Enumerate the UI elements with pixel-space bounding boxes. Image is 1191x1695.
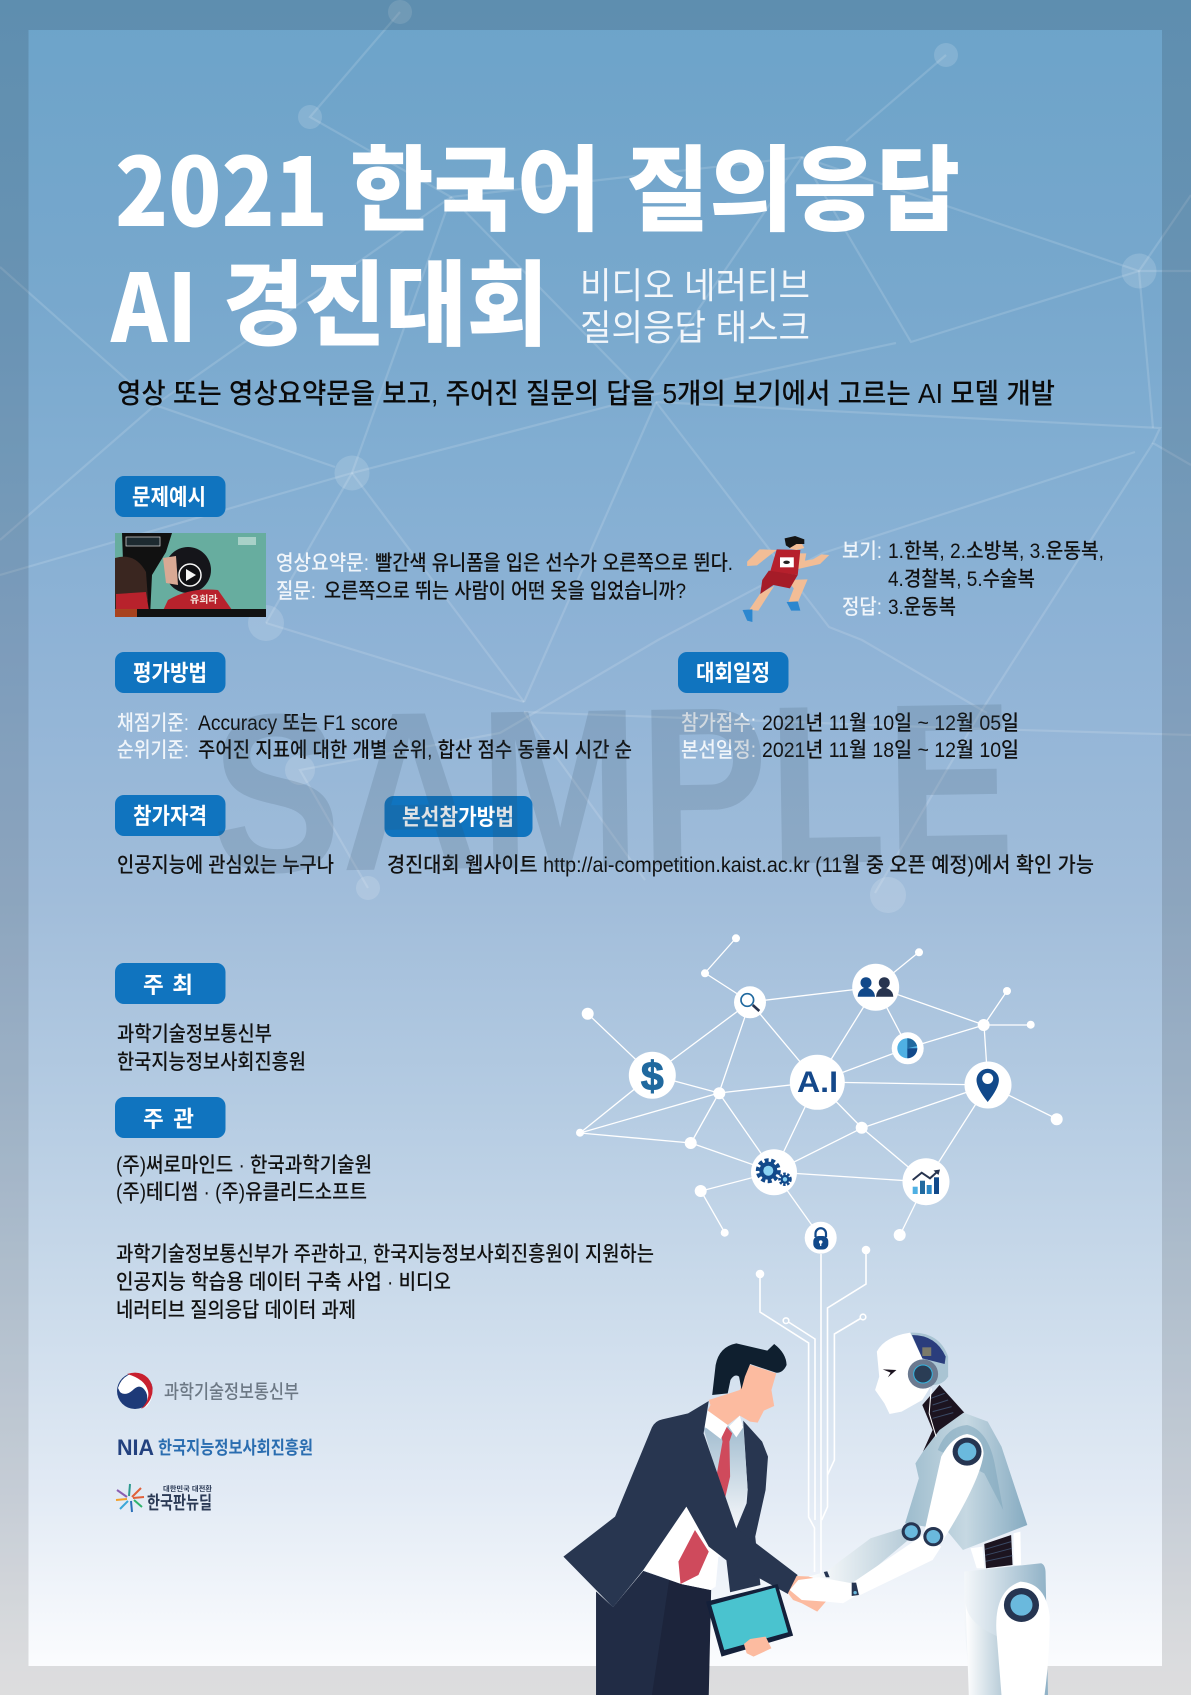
- logo: Ministry of Science and ICT: [117, 1373, 299, 1409]
- illustration: businessman and robot handshake: [563, 1333, 1050, 1695]
- answer choices: 3.운동복: [888, 596, 956, 619]
- button: 참가자격: 참가자격: [133, 804, 207, 829]
- button: 주최: [115, 963, 226, 1004]
- button: 평가방법: [115, 652, 226, 693]
- answer choices: 1.한복, 2.소방복, 3.운동복,: [888, 540, 1104, 563]
- icon: people: [852, 964, 899, 1011]
- icon: runner: [743, 536, 829, 622]
- circuit lines: [756, 1246, 870, 1574]
- project description: [116, 1243, 654, 1322]
- schedule text: 2021년 11월 10일 ~ 12월 05일: [762, 712, 1019, 735]
- title line 2: 경진대회: [223, 230, 548, 365]
- host organizations: [117, 1023, 306, 1074]
- icon: magnifier: [734, 986, 766, 1018]
- button: 문제예시: [115, 476, 226, 517]
- title line 1: 2021: [115, 118, 328, 254]
- button: 본선참가방법: [384, 796, 532, 837]
- evaluation text: 순위기준:: [117, 739, 189, 762]
- schedule text: [681, 712, 1019, 762]
- logo: Ministry of Science and ICT: 과학기술정보통신부: [164, 1381, 299, 1403]
- icon: dollar: $: [641, 1053, 664, 1099]
- button: 주관: [115, 1097, 226, 1138]
- evaluation text: 주어진 지표에 대한 개별 순위, 합산 점수 동률시 시간 순: [198, 739, 632, 762]
- businessman: [563, 1343, 826, 1695]
- answer choices: 정답:: [842, 596, 882, 619]
- video thumbnail: 유희라: [190, 593, 218, 606]
- button: 대회일정: [678, 652, 788, 693]
- example summary and question text: [276, 552, 733, 603]
- icon: gears: [751, 1149, 797, 1195]
- robot: [790, 1333, 1050, 1695]
- logo: NIA: [117, 1435, 313, 1460]
- answer choices: 보기:: [842, 540, 882, 563]
- evaluation text: [117, 712, 632, 762]
- organizing companies: [116, 1154, 372, 1204]
- organizing companies: (주)테디썸 · (주)유클리드소프트: [116, 1181, 367, 1204]
- subtitle: video narrative task: 비디오 네러티브: [580, 257, 810, 309]
- icon: A.I: [790, 1055, 845, 1110]
- organizing companies: (주)써로마인드 · 한국과학기술원: [116, 1154, 372, 1177]
- project description: 네러티브 질의응답 데이터 과제: [116, 1299, 356, 1322]
- schedule text: 2021년 11월 18일 ~ 12월 10일: [762, 739, 1019, 762]
- eligibility text: 인공지능에 관심있는 누구나: [117, 854, 334, 877]
- subtitle: video narrative task: 질의응답 태스크: [580, 299, 810, 351]
- title line 2: [110, 230, 548, 370]
- host organizations: 한국지능정보사회진흥원: [117, 1051, 306, 1074]
- icon: growth chart: [902, 1158, 950, 1205]
- button: 본선참가방법: 본선참가방법: [402, 805, 514, 830]
- button: 주최: 주 최: [143, 973, 193, 998]
- title line 2: AI: [110, 234, 197, 370]
- background network pattern: [0, 0, 1191, 913]
- example summary and question text: 영상요약문:: [276, 552, 369, 575]
- logo: Korean New Deal: [116, 1484, 213, 1513]
- logo: Korean New Deal: 한국판뉴딜: [147, 1493, 212, 1513]
- title line 1: [115, 115, 960, 254]
- icon: pie chart: [892, 1032, 924, 1064]
- schedule text: 참가접수:: [681, 712, 756, 735]
- example summary and question text: 빨간색 유니폼을 입은 선수가 오른쪽으로 뛴다.: [375, 552, 733, 575]
- title line 1: 한국어 질의응답: [350, 115, 960, 250]
- video thumbnail: [115, 533, 266, 617]
- example summary and question text: 오른쪽으로 뛰는 사람이 어떤 옷을 입었습니까?: [324, 580, 686, 603]
- evaluation text: Accuracy 또는 F1 score: [198, 712, 398, 735]
- button: 평가방법: 평가방법: [133, 661, 207, 686]
- subtitle: video narrative task: [580, 257, 810, 351]
- icon: location pin: [964, 1062, 1012, 1108]
- schedule text: 본선일정:: [681, 739, 756, 762]
- project description: 인공지능 학습용 데이터 구축 사업 · 비디오: [116, 1271, 451, 1294]
- description line: 영상 또는 영상요약문을 보고, 주어진 질문의 답을 5개의 보기에서 고르는 AI 모델 개발: [117, 378, 1055, 409]
- network nodes: [576, 934, 1063, 1241]
- watermark: SAMPLE: [210, 655, 1016, 920]
- logo: NIA: NIA: [117, 1435, 154, 1460]
- example summary and question text: 질문:: [276, 580, 316, 603]
- icon: A.I: A.I: [797, 1066, 838, 1099]
- logo: NIA: 한국지능정보사회진흥원: [158, 1438, 313, 1458]
- answer choices: [842, 540, 1104, 619]
- answer choices: 4.경찰복, 5.수술복: [888, 568, 1035, 591]
- network links: [580, 938, 1057, 1238]
- network diagram: [576, 934, 1063, 1254]
- logo: Korean New Deal: 대한민국 대전환: [163, 1484, 213, 1493]
- button: 문제예시: 문제예시: [132, 485, 206, 510]
- button: 주관: 주 관: [143, 1107, 194, 1132]
- project description: 과학기술정보통신부가 주관하고, 한국지능정보사회진흥원이 지원하는: [116, 1243, 654, 1266]
- icon: dollar: [629, 1052, 676, 1099]
- evaluation text: 채점기준:: [117, 712, 189, 735]
- icon: lock: [805, 1222, 837, 1254]
- host organizations: 과학기술정보통신부: [117, 1023, 272, 1046]
- button: 참가자격: [115, 795, 226, 836]
- participation method text: 경진대회 웹사이트 http://ai-competition.kaist.ac.kr (11월 중 오픈 예정)에서 확인 가능: [387, 854, 1094, 877]
- button: 대회일정: 대회일정: [696, 661, 770, 686]
